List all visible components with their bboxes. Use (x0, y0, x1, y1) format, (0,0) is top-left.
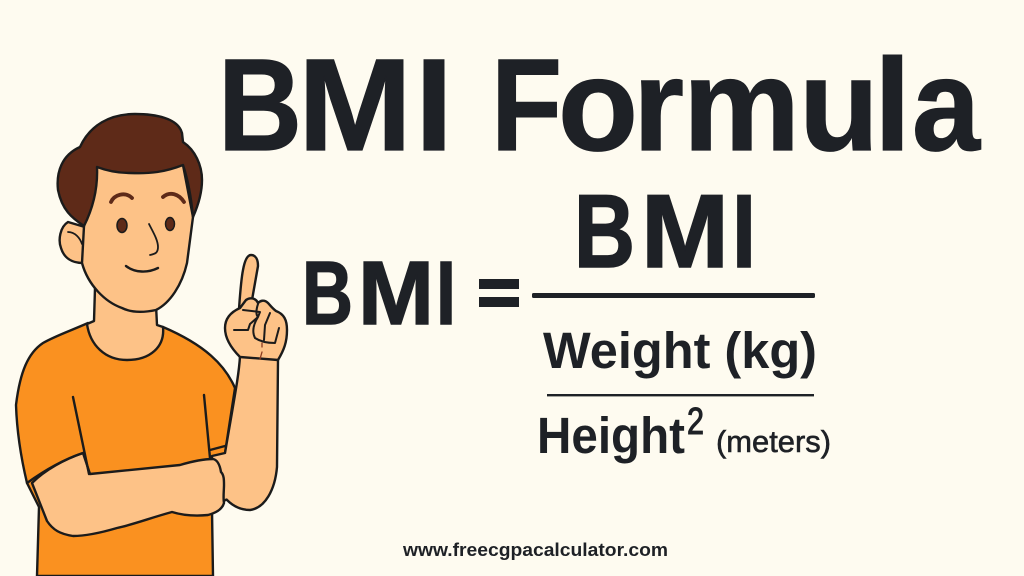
formula left side: BMI: M (358, 244, 434, 344)
website url: www.freecgpacalculator.com (402, 540, 668, 560)
title: u (799, 31, 879, 178)
title: I (415, 31, 453, 178)
title: o (558, 31, 638, 178)
title: B (218, 31, 302, 178)
title: m (683, 31, 800, 178)
denominator: height: Height (537, 407, 685, 464)
formula (302, 174, 831, 464)
ear detail (68, 232, 82, 244)
title: F (491, 31, 562, 178)
numerator: BMI: B (574, 174, 635, 290)
eyebrows (111, 194, 184, 202)
hand with raised finger (225, 255, 287, 360)
title: r (633, 31, 684, 178)
numerator: BMI: M (641, 174, 729, 290)
eyes (117, 218, 174, 232)
raised arm (212, 340, 278, 510)
nose (149, 224, 158, 255)
hair (58, 114, 202, 226)
inner fraction bar (547, 394, 814, 396)
meters unit: (meters) (716, 424, 831, 459)
formula left side: BMI: I (436, 244, 456, 344)
title: l (874, 31, 911, 178)
index finger (239, 255, 258, 309)
character illustration (16, 114, 287, 576)
shirt fold left (27, 397, 89, 483)
title: M (298, 31, 412, 178)
face (82, 165, 193, 312)
formula left side: BMI: B (302, 244, 353, 344)
denominator: weight: Weight (kg) (543, 322, 817, 379)
wrist crease (260, 343, 262, 359)
shirt (16, 323, 235, 576)
equals sign (479, 279, 519, 307)
neck (87, 288, 163, 360)
sleeve edge on right (210, 446, 225, 450)
numerator: BMI (574, 174, 756, 290)
squared superscript: 2 (687, 401, 704, 443)
fist (225, 298, 287, 360)
ear (60, 222, 95, 263)
head (58, 114, 202, 312)
numerator: BMI: I (732, 174, 756, 290)
main fraction bar (532, 293, 815, 298)
title: a (912, 31, 981, 178)
mouth (126, 266, 158, 272)
title (218, 31, 981, 178)
formula left side: BMI (302, 244, 456, 344)
shirt fold right (204, 395, 210, 458)
crossed forearm (32, 453, 224, 536)
finger folds (234, 304, 279, 343)
